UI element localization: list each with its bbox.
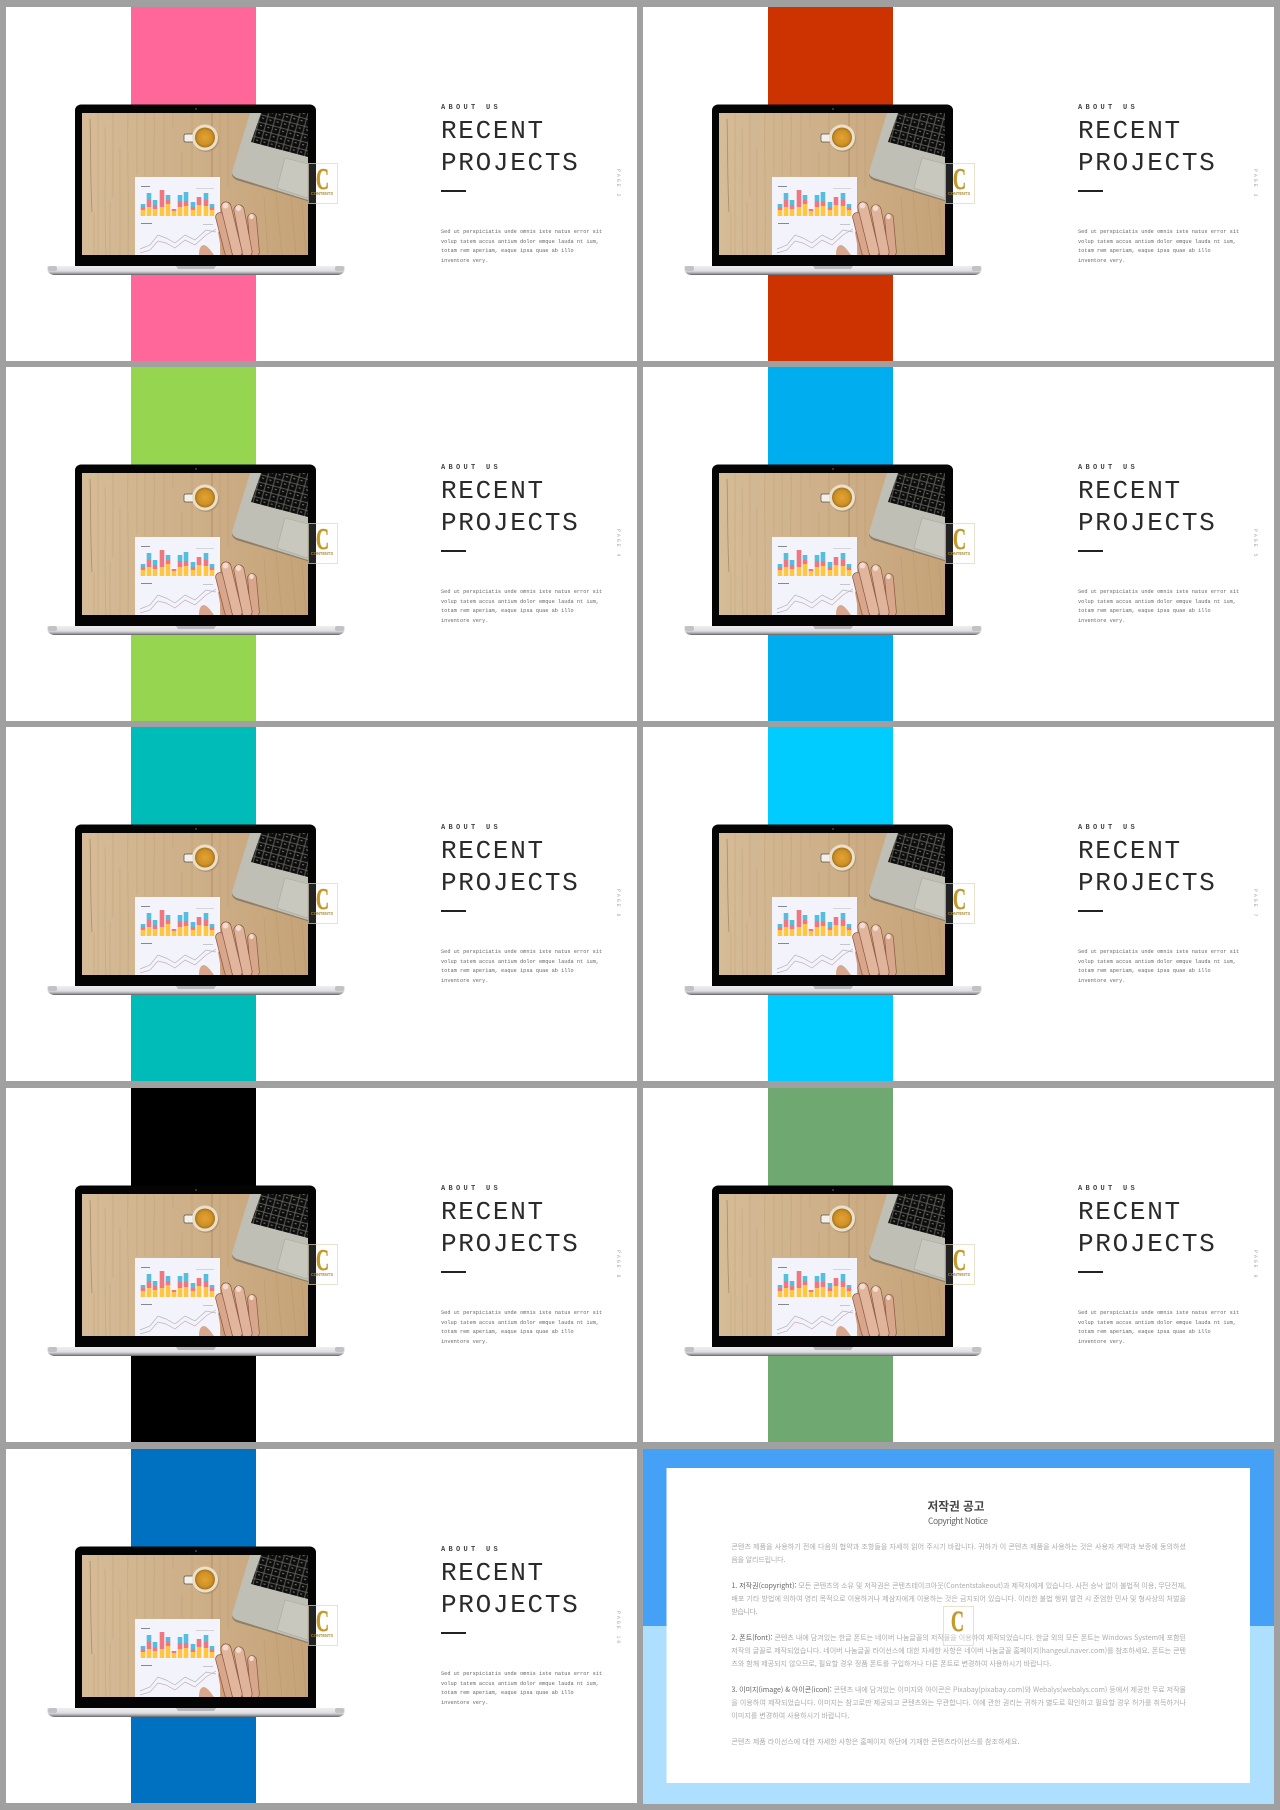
cyan colour stripe [768,727,893,1081]
watermark logo [945,1244,975,1285]
body text: volup tatem accus antium dolor emque lauda nt ium, [441,239,599,245]
watermark logo [308,523,338,564]
body text: inventore very. [1078,258,1125,264]
notice body text: 받습니다. [731,1607,757,1617]
sage colour stripe [768,1088,893,1442]
heading: PROJECTS [441,508,579,538]
body text: Sed ut perspiciatis unde omnis iste natus error sit [1078,229,1239,235]
watermark logo: CONTENTS [311,911,333,916]
laptop with desk photo [684,104,982,275]
laptop with desk photo [47,464,345,635]
body text [441,949,602,984]
watermark logo: CONTENTS [948,551,970,556]
panel: slide 10 deep blue [6,1449,637,1803]
panel: copyright notice [643,1449,1274,1804]
watermark logo: C [951,1605,964,1638]
eyebrow: ABOUT US [441,1546,501,1554]
body text: volup tatem accus antium dolor emque lauda nt ium, [1078,239,1236,245]
body text: volup tatem accus antium dolor emque lauda nt ium, [441,599,599,605]
body text: inventore very. [441,618,488,624]
panel: slide 6 teal [6,727,637,1081]
watermark logo [944,1605,974,1646]
heading: PROJECTS [441,148,579,178]
heading rule [1078,910,1103,912]
heading: RECENT [1078,836,1182,866]
heading: RECENT [441,476,545,506]
body text: Sed ut perspiciatis unde omnis iste natus error sit [1078,589,1239,595]
heading rule [441,910,466,912]
notice body text [731,1542,1187,1747]
body text: inventore very. [1078,618,1125,624]
heading: RECENT [1078,116,1182,146]
body text: totam rem aperiam, eaque ipsa quae ab illo [1078,248,1211,254]
watermark logo [945,523,975,564]
body text: totam rem aperiam, eaque ipsa quae ab illo [441,1690,574,1696]
body text: volup tatem accus antium dolor emque lauda nt ium, [1078,599,1236,605]
page number: PAGE 10 [615,1611,621,1645]
heading: PROJECTS [1078,1228,1216,1258]
heading rule [441,190,466,192]
heading [441,116,579,178]
notice body text: 음을 알리드립니다. [731,1555,785,1565]
body text: totam rem aperiam, eaque ipsa quae ab illo [441,1329,574,1335]
notice body text: 콘텐츠 제품 라이선스에 대한 자세한 사항은 홈페이지 하단에 기재한 콘텐츠라이선스를 참조하세요. [731,1737,1019,1747]
eyebrow: ABOUT US [441,104,501,112]
eyebrow: ABOUT US [1078,1185,1138,1193]
body text: volup tatem accus antium dolor emque lauda nt ium, [441,959,599,965]
body text: inventore very. [1078,978,1125,984]
body text [1078,589,1239,624]
eyebrow: ABOUT US [441,1185,501,1193]
laptop with desk photo [684,464,982,635]
heading [1078,476,1216,538]
body text: Sed ut perspiciatis unde omnis iste natus error sit [441,1671,602,1677]
body text: Sed ut perspiciatis unde omnis iste natus error sit [1078,949,1239,955]
body text: inventore very. [1078,1339,1125,1345]
page number: PAGE 5 [1252,529,1258,558]
laptop with desk photo [47,824,345,995]
heading [1078,836,1216,898]
page number: PAGE 4 [615,529,621,558]
heading: PROJECTS [441,1590,579,1620]
heading: PROJECTS [1078,508,1216,538]
notice body text: 3. 이미지(image) & 아이콘(icon): 콘텐츠 내에 담겨있는 이미지와 아이콘은 Pixabay(pixabay.com)와 Webalys(webalys.com) 등에서 제공한 무료 저작물 [731,1685,1187,1695]
laptop with desk photo [47,104,345,275]
notice body text: 을 이용하여 제작되었습니다. 이미지는 참고로만 제공되고 콘텐츠와는 무관합니다. 이에 관한 권리는 귀하가 별도로 확인하고 필요할 경우 허가를 취득하거나 [731,1698,1187,1708]
panel: slide 8 black [6,1088,637,1442]
body text: totam rem aperiam, eaque ipsa quae ab illo [441,968,574,974]
notice title: 저작권 공고 [928,1498,985,1514]
heading rule [441,550,466,552]
eyebrow: ABOUT US [441,464,501,472]
watermark logo [945,163,975,204]
heading [441,836,579,898]
panel: slide 5 blue [643,367,1274,721]
body text: Sed ut perspiciatis unde omnis iste natus error sit [1078,1310,1239,1316]
eyebrow: ABOUT US [1078,824,1138,832]
watermark logo: CONTENTS [948,911,970,916]
body text: volup tatem accus antium dolor emque lauda nt ium, [441,1681,599,1687]
notice body text: 츠와 함께 제공되지 않으므로, 필요할 경우 정품 폰트를 구입하거나 다른 폰트로 변경하여 사용하시기 바랍니다. [731,1659,1051,1669]
notice body text: 콘텐츠 제품을 사용하기 전에 다음의 협약과 조항들을 자세히 읽어 주시기 바랍니다. 귀하가 이 콘텐츠 제품을 사용하는 것은 사용자 계약과 보증에 동의하셨 [731,1542,1187,1552]
laptop with desk photo [684,1186,982,1356]
panel: slide 2 pink [6,7,637,361]
page number: PAGE 3 [1252,169,1258,198]
body text: Sed ut perspiciatis unde omnis iste natus error sit [441,229,602,235]
teal colour stripe [131,727,256,1081]
watermark logo: CONTENTS [311,191,333,196]
heading: RECENT [1078,476,1182,506]
body text: Sed ut perspiciatis unde omnis iste natus error sit [441,589,602,595]
body text: totam rem aperiam, eaque ipsa quae ab illo [1078,1329,1211,1335]
heading rule [441,1632,466,1634]
green colour stripe [131,367,256,721]
page number: PAGE 2 [615,169,621,198]
laptop with desk photo [684,824,982,995]
heading [441,1558,579,1620]
heading [441,1197,579,1258]
heading: RECENT [1078,1197,1182,1227]
notice subtitle: Copyright Notice [928,1515,988,1527]
blue colour stripe [768,367,893,721]
heading [1078,1197,1216,1258]
body text: totam rem aperiam, eaque ipsa quae ab illo [1078,608,1211,614]
body text [1078,229,1239,264]
notice body text: 배포 기타 방법에 의하여 영리 목적으로 이용하거나 제삼자에게 이용하는 것은 금지되어 있습니다. 이러한 불법 행위 발견 시 준엄한 민사 및 형사상의 처벌을 [731,1594,1187,1604]
notice body text: 이미지를 변경하여 사용하시기 바랍니다. [731,1711,849,1721]
body text: Sed ut perspiciatis unde omnis iste natus error sit [441,949,602,955]
watermark logo [308,1605,338,1646]
page number: PAGE 6 [615,889,621,918]
laptop with desk photo [47,1186,345,1356]
body text: totam rem aperiam, eaque ipsa quae ab illo [1078,968,1211,974]
heading: RECENT [441,1197,545,1227]
page number: PAGE 7 [1252,889,1258,918]
watermark logo: CONTENTS [311,1633,333,1638]
deep blue colour stripe [131,1449,256,1803]
body text: totam rem aperiam, eaque ipsa quae ab illo [441,248,574,254]
laptop with desk photo [47,1546,345,1717]
body text: inventore very. [441,1339,488,1345]
page number: PAGE 8 [615,1250,621,1279]
body text [441,1310,602,1345]
body text [441,229,602,264]
heading: RECENT [441,1558,545,1588]
notice body text: 1. 저작권(copyright): 모든 콘텐츠의 소유 및 저작권은 콘텐츠테이크아웃(Contentstakeout)과 제작자에게 있습니다. 사전 승낙 없이 불법적 이용, 무단전재, [731,1581,1186,1591]
body text: inventore very. [441,1700,488,1706]
heading [441,476,579,538]
eyebrow: ABOUT US [1078,104,1138,112]
watermark logo [308,1244,338,1285]
black colour stripe [131,1088,256,1442]
heading: RECENT [441,116,545,146]
heading: PROJECTS [441,1228,579,1258]
heading: PROJECTS [441,868,579,898]
watermark logo: CONTENTS [311,1272,333,1277]
panel: slide 9 sage [643,1088,1274,1442]
panel: slide 4 green [6,367,637,721]
body text: inventore very. [441,978,488,984]
heading [1078,116,1216,178]
heading rule [441,1271,466,1273]
watermark logo: CONTENTS [948,1272,970,1277]
notice body text: 2. 폰트(font): 콘텐츠 내에 담겨있는 한글 폰트는 네이버 나눔글꼴의 저작물을 이용하여 제작되었습니다. 한글 외의 모든 폰트는 Windows System에 포함된 [731,1633,1186,1643]
heading: RECENT [441,836,545,866]
body text: inventore very. [441,258,488,264]
body text: volup tatem accus antium dolor emque lauda nt ium, [441,1320,599,1326]
body text [1078,949,1239,984]
body text: Sed ut perspiciatis unde omnis iste natus error sit [441,1310,602,1316]
heading rule [1078,190,1103,192]
heading: PROJECTS [1078,868,1216,898]
heading rule [1078,1271,1103,1273]
body text: volup tatem accus antium dolor emque lauda nt ium, [1078,1320,1236,1326]
watermark logo [308,883,338,924]
red colour stripe [768,7,893,361]
watermark logo [945,883,975,924]
body text: volup tatem accus antium dolor emque lauda nt ium, [1078,959,1236,965]
heading rule [1078,550,1103,552]
body text [441,589,602,624]
watermark logo: CONTENTS [311,551,333,556]
body text [1078,1310,1239,1345]
heading: PROJECTS [1078,148,1216,178]
panel: slide 3 red [643,7,1274,361]
body text [441,1671,602,1706]
panel: slide 7 cyan [643,727,1274,1081]
body text: totam rem aperiam, eaque ipsa quae ab illo [441,608,574,614]
pink colour stripe [131,7,256,361]
page number: PAGE 9 [1252,1250,1258,1279]
eyebrow: ABOUT US [1078,464,1138,472]
watermark logo [308,163,338,204]
notice body text: 저작의 글꼴로 제작되었습니다. 네이버 나눔글꼴 라이선스에 대한 자세한 사항은 네이버 나눔글꼴 홈페이지(hangeul.naver.com)를 참조하세요. 폰트는 콘텐 [731,1646,1186,1656]
watermark logo: CONTENTS [948,191,970,196]
eyebrow: ABOUT US [441,824,501,832]
